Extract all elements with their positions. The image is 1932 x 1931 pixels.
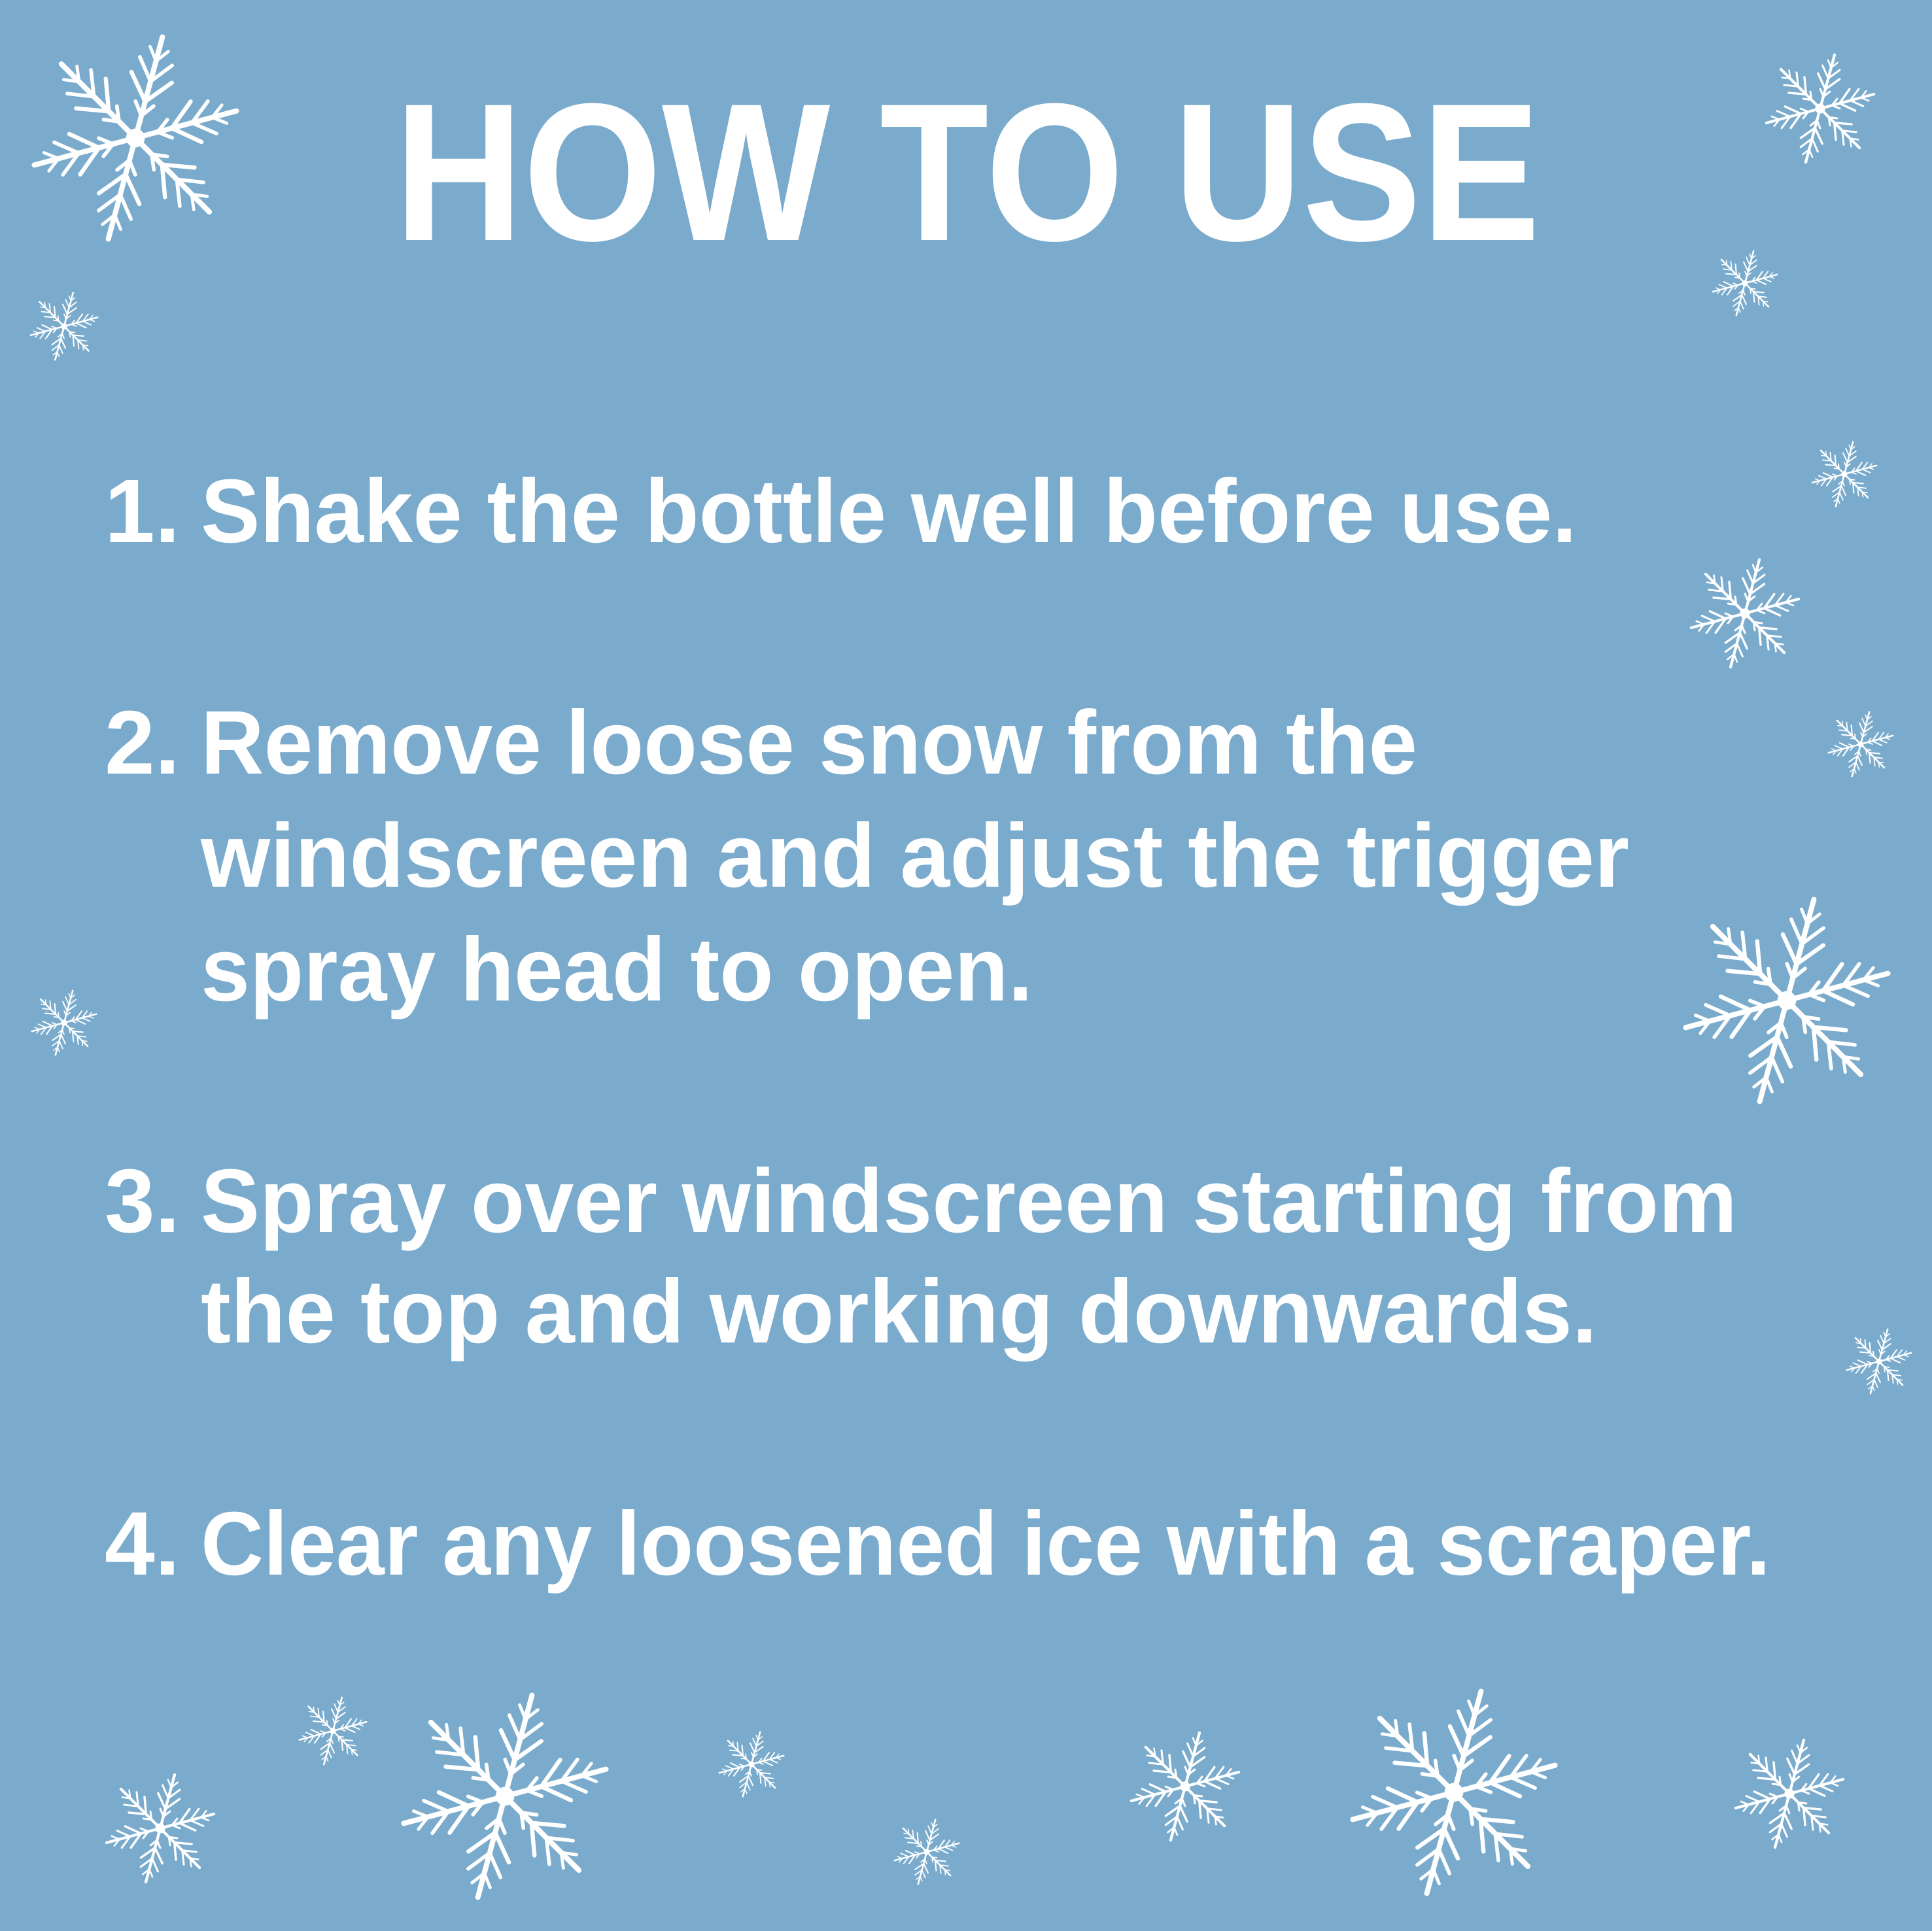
step 3 bbox=[105, 1151, 1737, 1362]
step 1: 1. bbox=[105, 461, 180, 562]
step 2: Remove loose snow from the bbox=[201, 692, 1417, 793]
step 4: Clear any loosened ice with a scraper. bbox=[201, 1494, 1770, 1594]
step 2: windscreen and adjust the trigger bbox=[200, 806, 1629, 906]
step 2: 2. bbox=[105, 692, 180, 793]
step 2 bbox=[105, 692, 1629, 1020]
step 3: 3. bbox=[105, 1151, 180, 1252]
step 4: 4. bbox=[105, 1494, 180, 1594]
step 2: spray head to open. bbox=[201, 919, 1033, 1020]
step 3: the top and working downwards. bbox=[201, 1261, 1597, 1362]
step 3: Spray over windscreen starting from bbox=[201, 1151, 1737, 1252]
step 1: Shake the bottle well before use. bbox=[201, 461, 1577, 562]
title: HOW TO USE bbox=[394, 62, 1540, 282]
